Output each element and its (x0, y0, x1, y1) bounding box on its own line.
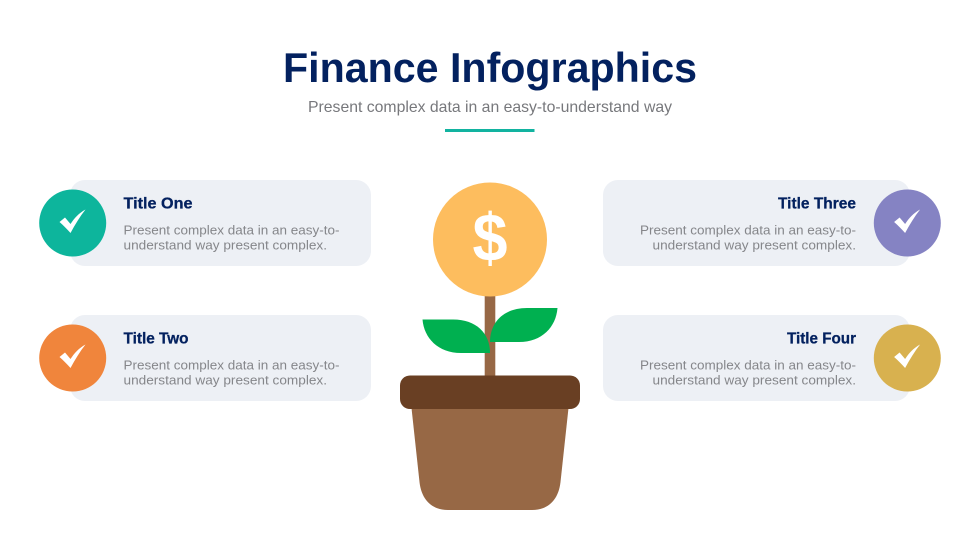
body text: understand way present complex. (652, 238, 856, 252)
icon: gold check circle (874, 324, 941, 392)
coin (433, 182, 547, 296)
dollar sign: $ (472, 200, 508, 276)
heading: Title Three (778, 196, 856, 212)
body text: understand way present complex. (652, 372, 856, 388)
heading: Title One (124, 196, 193, 212)
heading: Title Two (124, 330, 189, 348)
stem (485, 295, 495, 377)
body text: Present complex data in an easy-to- (640, 358, 856, 372)
pot rim (400, 376, 580, 409)
title: Finance Infographics (283, 44, 697, 91)
heading: Title Four (787, 330, 856, 348)
body text: Present complex data in an easy-to- (640, 222, 856, 238)
panel: title four (603, 315, 941, 401)
pot body (412, 408, 568, 510)
icon: orange check circle (39, 324, 106, 392)
body text: Present complex data in an easy-to- (124, 222, 340, 238)
body text: understand way present complex. (124, 238, 327, 252)
icon: purple check circle (874, 190, 941, 256)
body text (124, 358, 340, 388)
right leaf (490, 308, 558, 342)
accent underline (445, 129, 534, 132)
panel: title two (39, 315, 371, 401)
icon: teal check circle (39, 190, 106, 256)
icon: money plant (400, 182, 580, 510)
body text: Present complex data in an easy-to- (124, 358, 340, 372)
left leaf (422, 320, 490, 353)
panel: title three (603, 180, 941, 266)
subtitle: Present complex data in an easy-to-understand way (308, 99, 672, 116)
body text (640, 222, 856, 252)
panel: title one (39, 180, 371, 266)
body text (640, 358, 856, 388)
body text (124, 222, 340, 252)
body text: understand way present complex. (124, 372, 327, 388)
